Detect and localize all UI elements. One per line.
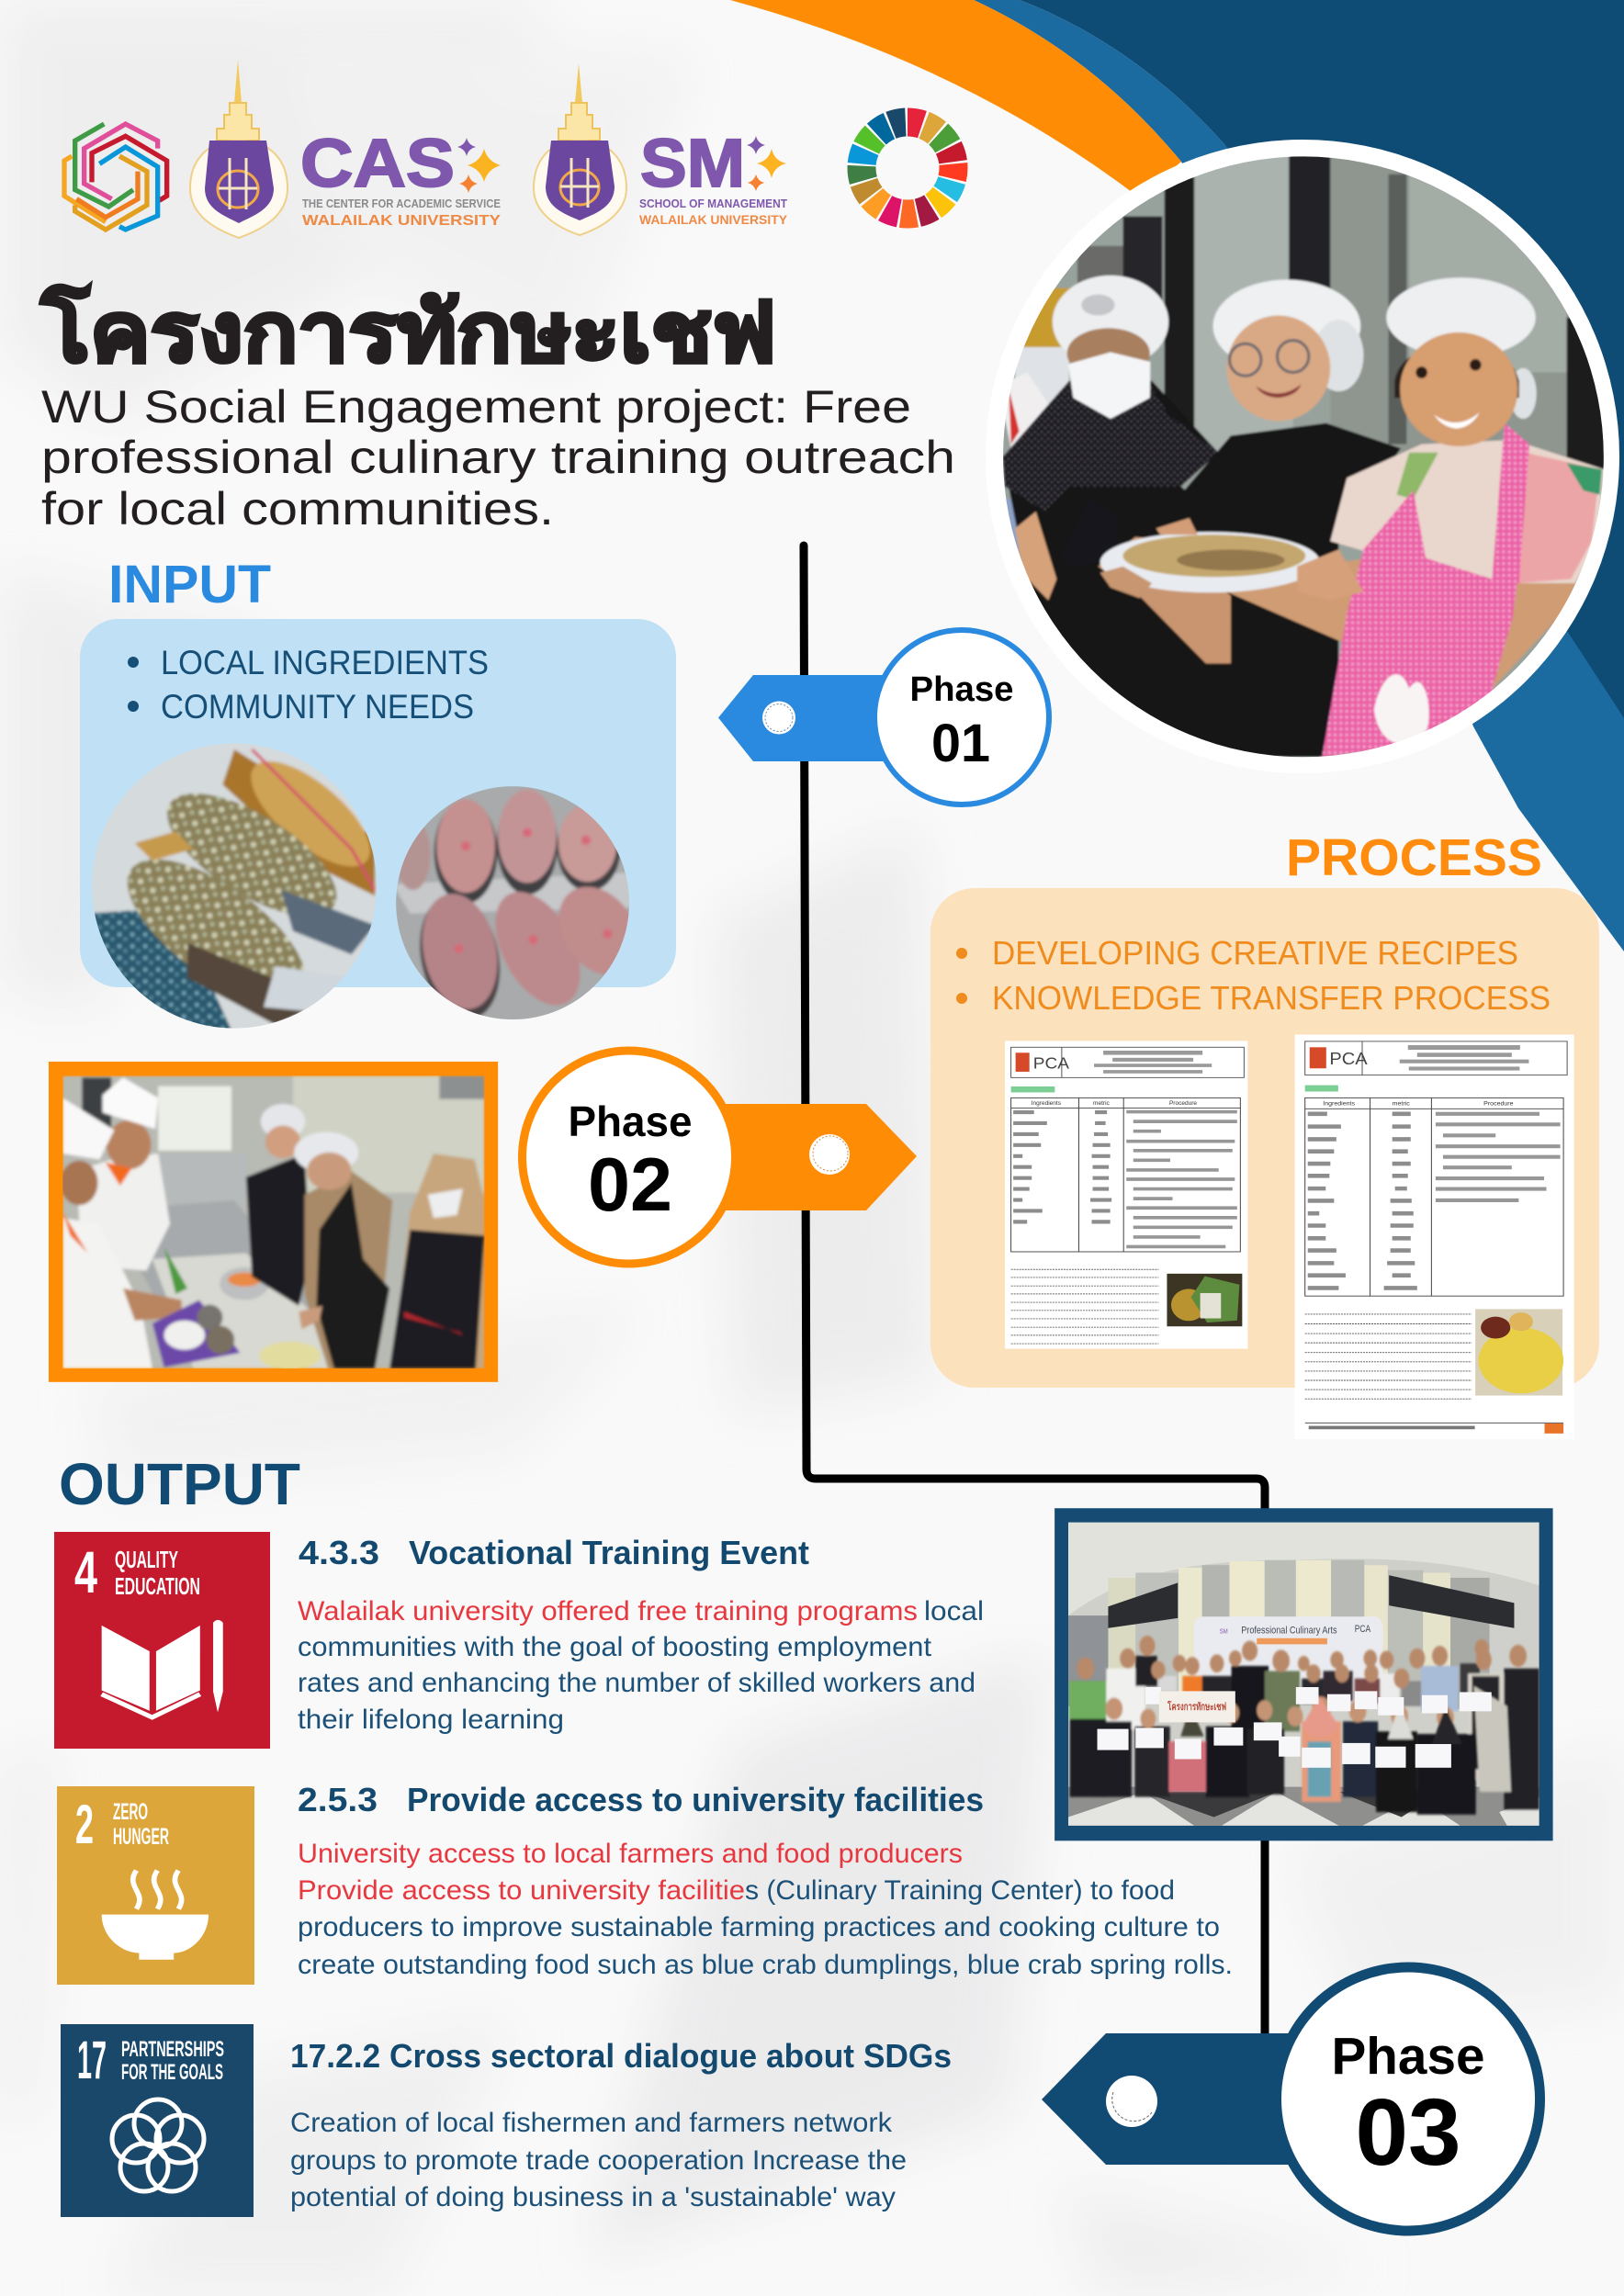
text block: target 4.3.3: Walailak university offered free training programs xyxy=(298,1596,918,1626)
icon: SDG 4 quality education xyxy=(54,1532,270,1749)
bullet list: input: LOCAL INGREDIENTS xyxy=(161,644,489,681)
logo: CAS wordmark xyxy=(300,125,501,229)
women xyxy=(246,1154,310,1306)
arms and plate xyxy=(1098,537,1231,663)
corner swoosh xyxy=(730,0,1624,951)
text block: target 2.5.3: Provide access to university facilities xyxy=(407,1781,984,1818)
text block: target 17.2.2: Creation of local fishermen and farmers network xyxy=(290,2108,893,2138)
icon: SDG 4 quality education: QUALITY xyxy=(115,1546,178,1573)
phase 02 marker: 02 xyxy=(588,1142,672,1227)
photo: group with certificates xyxy=(1054,1508,1553,1840)
photo: fish steaks xyxy=(396,786,629,1019)
text block: target 2.5.3: 2.5.3 xyxy=(298,1781,378,1818)
panel: process xyxy=(930,888,1599,1388)
photo: group with certificates: Professional Culinary Arts xyxy=(1241,1625,1337,1637)
icon: SDG 2 zero hunger: HUNGER xyxy=(113,1824,169,1850)
phase 03 marker xyxy=(1042,1967,1539,2231)
heading: OUTPUT: OUTPUT xyxy=(59,1451,300,1517)
bullet list: input xyxy=(128,644,489,726)
icon: SDG 2 zero hunger: ZERO xyxy=(113,1799,148,1825)
logo: CAS wordmark: WALAILAK UNIVERSITY xyxy=(302,213,501,229)
text block: target 2.5.3 xyxy=(298,1781,1233,1980)
text block: target 17.2.2: groups to promote trade cooperation Increase the xyxy=(290,2145,907,2176)
phase 03 marker: 03 xyxy=(1356,2079,1460,2185)
subtitle: professional culinary training outreach xyxy=(41,432,955,483)
subtitle: for local communities. xyxy=(41,483,554,535)
recipe sheet 1: Procedure xyxy=(1169,1100,1198,1107)
recipe sheet 1: PCA xyxy=(1033,1054,1070,1073)
recipe sheet 2 xyxy=(1295,1035,1574,1439)
icon: SDG 2 zero hunger: 2 xyxy=(75,1794,94,1855)
photo: three cooks holding plate xyxy=(1003,140,1619,757)
title: โครงการทักษะเชฟ xyxy=(40,285,776,379)
bullet list: input: COMMUNITY NEEDS xyxy=(161,688,474,726)
front row xyxy=(1092,1686,1511,1815)
text block: target 2.5.3: Provide access to university facilitie xyxy=(298,1875,745,1906)
logo: SM wordmark xyxy=(639,125,788,227)
recipe sheet 2: Ingredients xyxy=(1323,1101,1356,1108)
text block: target 4.3.3: Vocational Training Event xyxy=(409,1534,809,1571)
photo: group with certificates: SM xyxy=(1220,1628,1228,1636)
text block: target 2.5.3: producers to improve sustainable farming practices and cooking culture to xyxy=(298,1912,1220,1942)
icon: SDG 17 partnerships xyxy=(61,2024,254,2217)
icon: SDG 17 partnerships: 17 xyxy=(77,2031,107,2090)
photo: kitchen training frame xyxy=(49,1062,498,1382)
recipe sheet 2: PCA xyxy=(1329,1051,1368,1069)
text block: target 2.5.3: s (Culinary Training Center) to food xyxy=(745,1875,1175,1906)
logo: university crest 1 xyxy=(190,60,288,238)
recipe sheet 1: metric xyxy=(1093,1100,1110,1107)
photo: group with certificates: โครงการทักษะเชฟ xyxy=(1167,1700,1226,1714)
text block: target 4.3.3: local xyxy=(924,1596,984,1626)
photo: group with certificates: PCA xyxy=(1355,1624,1371,1636)
logo: university crest 2 xyxy=(534,63,626,235)
phase 01 marker xyxy=(718,630,1049,805)
recipe sheet 2: Procedure xyxy=(1483,1101,1514,1108)
bullet list: process xyxy=(956,934,1551,1017)
heading: PROCESS: PROCESS xyxy=(1286,828,1542,887)
back row people xyxy=(1069,1636,1539,1815)
text block: target 4.3.3: their lifelong learning xyxy=(298,1705,564,1735)
subtitle xyxy=(41,381,955,535)
logo: CAS wordmark: THE CENTER FOR ACADEMIC SERVICE xyxy=(302,197,501,210)
icon: SDG 17 partnerships: PARTNERSHIPS xyxy=(121,2037,224,2062)
photo: blue crabs xyxy=(88,737,386,1037)
icon: SDG 2 zero hunger xyxy=(57,1786,254,1985)
subtitle: WU Social Engagement project: Free xyxy=(41,381,911,433)
timeline line xyxy=(804,546,1265,2039)
text block: target 2.5.3: create outstanding food such as blue crab dumplings, blue crab spring rolls. xyxy=(298,1950,1233,1980)
phase 01 marker: 01 xyxy=(931,714,990,773)
chefs xyxy=(76,1154,170,1271)
icon: SDG 4 quality education: 4 xyxy=(74,1539,97,1605)
text block: target 4.3.3: 4.3.3 xyxy=(299,1534,379,1571)
text block: target 4.3.3 xyxy=(298,1534,984,1735)
logo: SM wordmark: SCHOOL OF MANAGEMENT xyxy=(639,197,787,210)
woman right xyxy=(1330,440,1604,583)
text block: target 17.2.2 xyxy=(290,2037,952,2212)
logo: CAS wordmark: CAS xyxy=(300,125,455,201)
phase 02 marker xyxy=(522,1051,917,1264)
heading: INPUT: INPUT xyxy=(108,555,271,614)
text block: target 4.3.3: communities with the goal of boosting employment xyxy=(298,1632,932,1662)
logo: SM wordmark: WALAILAK UNIVERSITY xyxy=(639,212,788,227)
panel: input xyxy=(80,619,676,987)
icon: SDG 4 quality education: EDUCATION xyxy=(115,1572,200,1600)
bullet list: process: KNOWLEDGE TRANSFER PROCESS xyxy=(992,979,1551,1017)
tray and bowls xyxy=(152,1300,240,1367)
phase 02 marker: Phase xyxy=(568,1097,693,1145)
phase 03 marker: Phase xyxy=(1332,2027,1484,2086)
recipe sheet 2: metric xyxy=(1393,1101,1410,1108)
logo: SDG wheel xyxy=(862,122,953,214)
woman left xyxy=(1003,381,1239,769)
text block: target 17.2.2: potential of doing business in a 'sustainable' way xyxy=(290,2182,896,2212)
text block: target 17.2.2: 17.2.2 Cross sectoral dialogue about SDGs xyxy=(290,2037,952,2075)
bullet list: process: DEVELOPING CREATIVE RECIPES xyxy=(992,934,1518,972)
logo: hexagon rings xyxy=(64,124,167,230)
recipe sheet 1 xyxy=(1005,1041,1247,1349)
certificates xyxy=(1098,1687,1492,1768)
icon: SDG 17 partnerships: FOR THE GOALS xyxy=(121,2060,223,2085)
woman middle xyxy=(1177,423,1401,757)
recipe sheet 1: Ingredients xyxy=(1032,1100,1061,1107)
phase 01 marker: Phase xyxy=(909,670,1014,709)
text block: target 4.3.3: rates and enhancing the number of skilled workers and xyxy=(298,1668,976,1698)
logo: SM wordmark: SM xyxy=(640,125,745,201)
text block: target 2.5.3: University access to local farmers and food producers xyxy=(298,1839,963,1869)
